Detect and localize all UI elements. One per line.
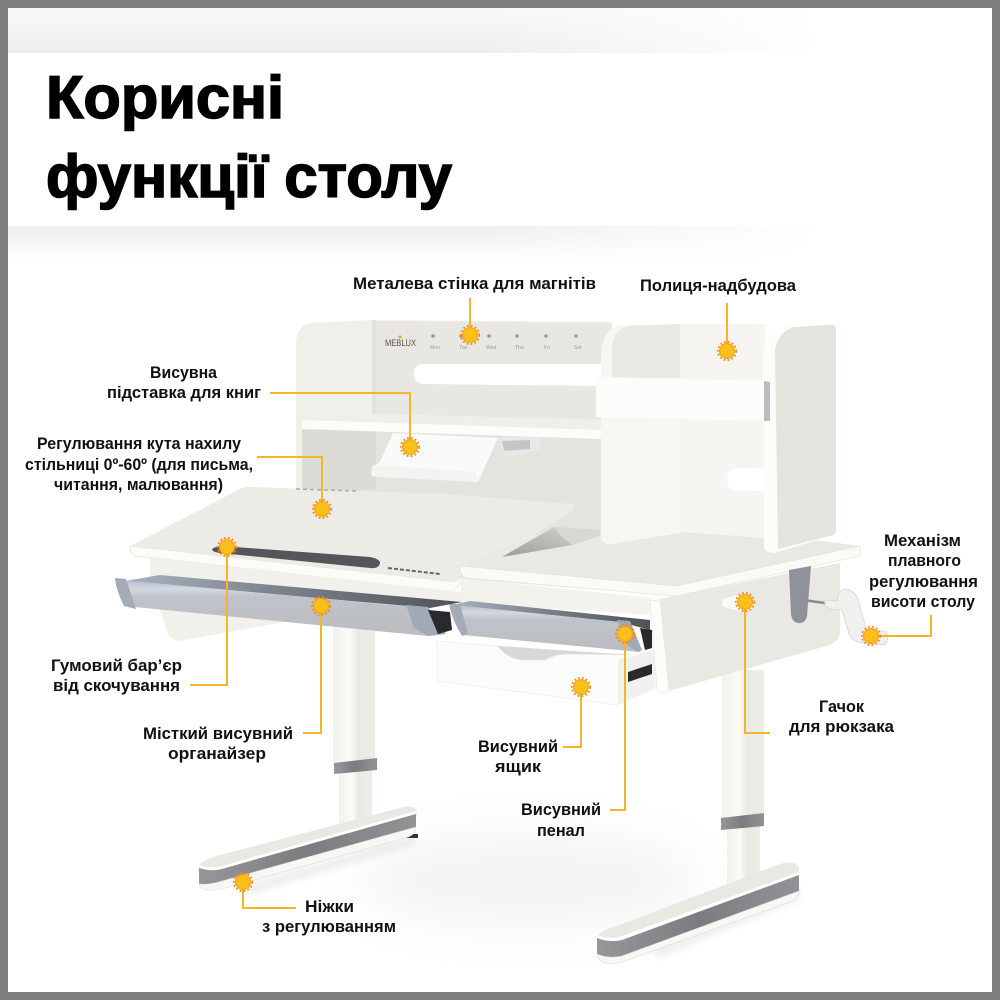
callout: metal wall for magnets: [353, 274, 596, 344]
rubber anti-roll bar: [212, 546, 380, 568]
tower right panel: [763, 324, 836, 553]
callout: shelf add-on: Полиця-надбудова: [640, 276, 797, 295]
lower gradient band: [8, 226, 992, 262]
callout: height mechanism: [862, 531, 978, 645]
left drawer underside panel: [160, 608, 295, 641]
callout: height mechanism: плавного: [888, 551, 961, 570]
right leg: [597, 670, 800, 964]
callout: book stand: підставка для книг: [107, 383, 261, 402]
title: [46, 64, 453, 210]
callout: metal wall for magnets: Металева стінка для магнітів: [353, 274, 596, 293]
callout: adjustable feet: з регулюванням: [262, 917, 396, 936]
left column: [333, 622, 375, 767]
hutch shelf: [302, 414, 602, 439]
callout: backpack hook: [736, 593, 895, 736]
callout: adjustable feet: Ніжки: [305, 897, 354, 916]
callout: backpack hook: Гачок: [819, 697, 864, 716]
hutch back panel: Sat: [574, 345, 582, 351]
callout: adjustable feet: [234, 873, 396, 936]
backpack hook: [722, 594, 752, 612]
apron under right desktop: [460, 578, 652, 615]
hutch back panel: Fri: [544, 345, 550, 351]
hutch back panel: Thu: [515, 345, 524, 351]
callout: height mechanism: регулювання: [869, 572, 978, 591]
callout: tilt angle: читання, малювання): [54, 475, 223, 494]
callout: tilt angle: [25, 434, 331, 518]
callout: book stand: [107, 363, 419, 456]
title: функції столу: [46, 143, 453, 210]
tower slot: [727, 468, 766, 491]
callout: backpack hook: для рюкзака: [789, 717, 895, 736]
callout: drawer box: ящик: [494, 757, 542, 776]
apron under tilted top: [150, 558, 462, 606]
tilted desktop: [130, 487, 574, 591]
top gradient band: [8, 8, 992, 53]
tower left panel: [601, 324, 680, 544]
callout: organizer: органайзер: [168, 744, 266, 763]
callout: tilt angle: стільниці 0º-60º (для письма,: [25, 455, 253, 474]
callout: rubber barrier: Гумовий бар’єр: [51, 656, 182, 675]
callout: pencil drawer: пенал: [537, 821, 585, 840]
callout: drawer box: [478, 678, 590, 776]
tower back: [680, 324, 765, 538]
left leg: [198, 758, 418, 895]
pencil drawer: [449, 601, 652, 652]
tower white band: [596, 377, 770, 421]
title: Корисні: [46, 64, 284, 131]
callout: drawer box: Висувний: [478, 737, 558, 756]
callout: organizer: Місткий висувний: [143, 724, 293, 743]
callout: pencil drawer: Висувний: [521, 800, 601, 819]
callout: rubber barrier: [51, 538, 236, 695]
hutch back panel: Wed: [486, 345, 496, 351]
hutch back panel: Tue: [459, 345, 468, 351]
callout: shelf add-on: [640, 276, 797, 360]
book stand: [372, 433, 540, 482]
crank mechanism: [803, 589, 888, 645]
hutch back panel: Mon: [430, 345, 440, 351]
callout: height mechanism: висоти столу: [871, 592, 975, 611]
left drawer: [115, 575, 462, 636]
height bracket: [789, 566, 811, 623]
desk illustration: [115, 320, 888, 964]
callout: tilt angle: Регулювання кута нахилу: [37, 434, 241, 453]
hutch back panel: [296, 320, 612, 535]
floor shadow: [360, 835, 700, 925]
callout: pencil drawer: [521, 625, 634, 840]
right side box: [650, 563, 840, 693]
callout: book stand: Висувна: [150, 363, 218, 382]
area under shelf: [302, 428, 602, 535]
callout: height mechanism: Механізм: [884, 531, 961, 550]
callout: rubber barrier: від скочування: [53, 676, 180, 695]
callout: organizer: [143, 597, 330, 763]
hutch back panel: MEBLUX: [385, 338, 416, 348]
drawer box: [437, 640, 656, 705]
right desktop: [461, 527, 860, 596]
